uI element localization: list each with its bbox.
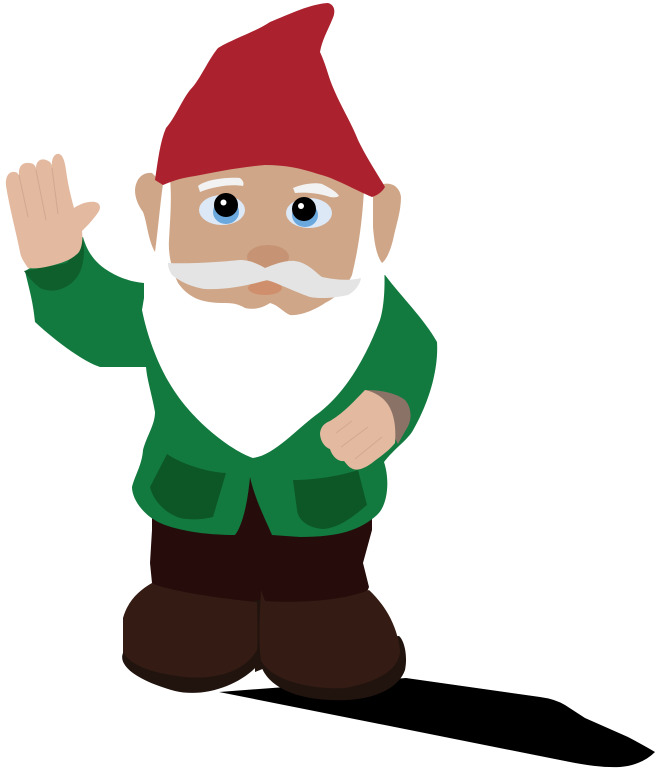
shadow (219, 678, 655, 767)
left sleeve cuff (24, 238, 84, 291)
lowered right hand with cuff (320, 390, 411, 470)
left boot (122, 583, 258, 693)
right pocket (293, 470, 367, 529)
jacket body and sleeves (25, 237, 437, 537)
nose (247, 245, 289, 269)
jacket (24, 237, 437, 537)
right eyebrow (293, 183, 339, 197)
moustache (168, 260, 361, 298)
finger lines (19, 168, 58, 220)
raised left hand (6, 154, 100, 268)
left ear (135, 173, 163, 252)
right boot (259, 590, 406, 700)
right cuff (365, 390, 411, 444)
hat (155, 3, 385, 197)
right hand (320, 390, 395, 470)
boots (122, 583, 406, 700)
face (169, 155, 364, 315)
right ear (373, 184, 401, 263)
eyebrows (198, 178, 339, 197)
left eyebrow (198, 178, 244, 192)
mouth (248, 281, 282, 295)
trousers (150, 470, 372, 610)
beard (142, 180, 385, 458)
knuckle lines (336, 421, 382, 459)
left pocket (150, 454, 226, 519)
left eye (199, 193, 245, 225)
gap between boots (255, 600, 265, 672)
right eye (286, 197, 332, 228)
